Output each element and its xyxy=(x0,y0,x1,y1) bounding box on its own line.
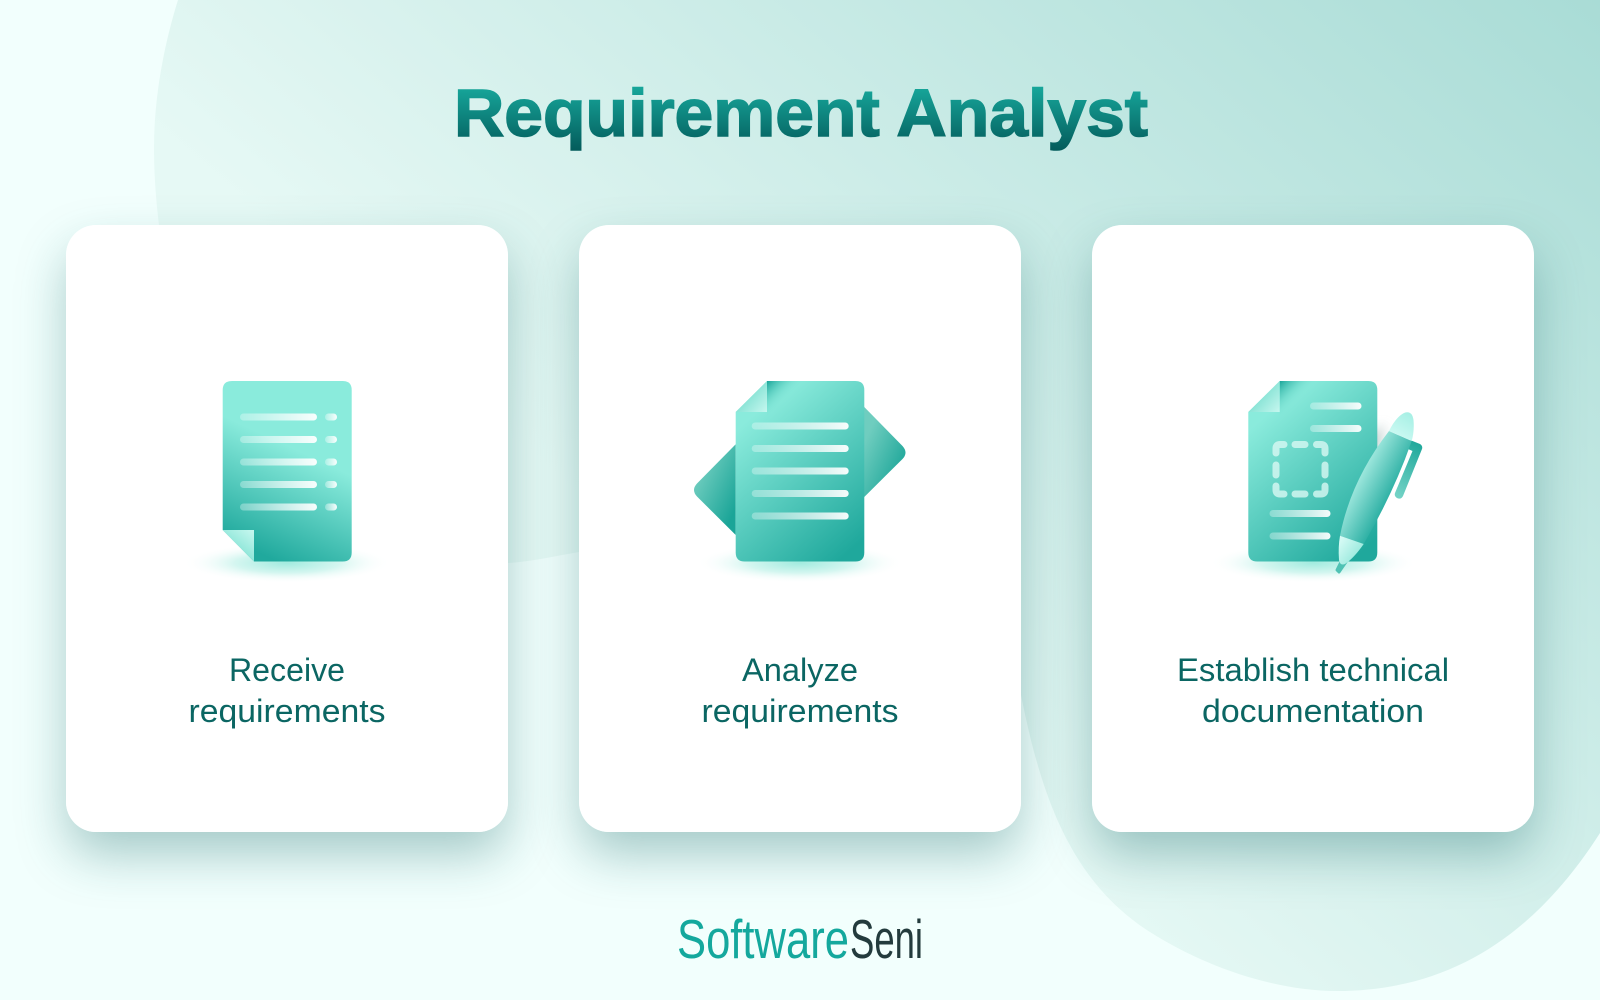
panel: receive requirements xyxy=(66,225,508,832)
label: analyze requirements: requirements xyxy=(702,693,898,729)
label: establish technical documentation xyxy=(1177,652,1449,729)
icon: single document with folded corner xyxy=(206,381,368,578)
logo: SoftwareSeni: Seni xyxy=(850,908,923,970)
panel: analyze requirements xyxy=(579,225,1021,832)
label: analyze requirements: Analyze xyxy=(742,652,858,688)
pen clip xyxy=(1395,440,1422,499)
panel: establish technical documentation xyxy=(1092,225,1534,832)
label: establish technical documentation: documentation xyxy=(1202,693,1424,729)
label: receive requirements: Receive xyxy=(229,652,345,688)
title: Requirement Analyst xyxy=(454,76,1148,151)
icon: document with pen xyxy=(1232,381,1422,578)
pen body xyxy=(1337,412,1414,572)
icon: document over diamond arrows xyxy=(694,381,906,578)
label: receive requirements xyxy=(188,652,386,729)
logo: SoftwareSeni: Software xyxy=(677,908,849,970)
label: receive requirements: requirements xyxy=(188,693,386,729)
label: analyze requirements xyxy=(702,652,898,729)
label: establish technical documentation: Establish technical xyxy=(1177,652,1449,688)
